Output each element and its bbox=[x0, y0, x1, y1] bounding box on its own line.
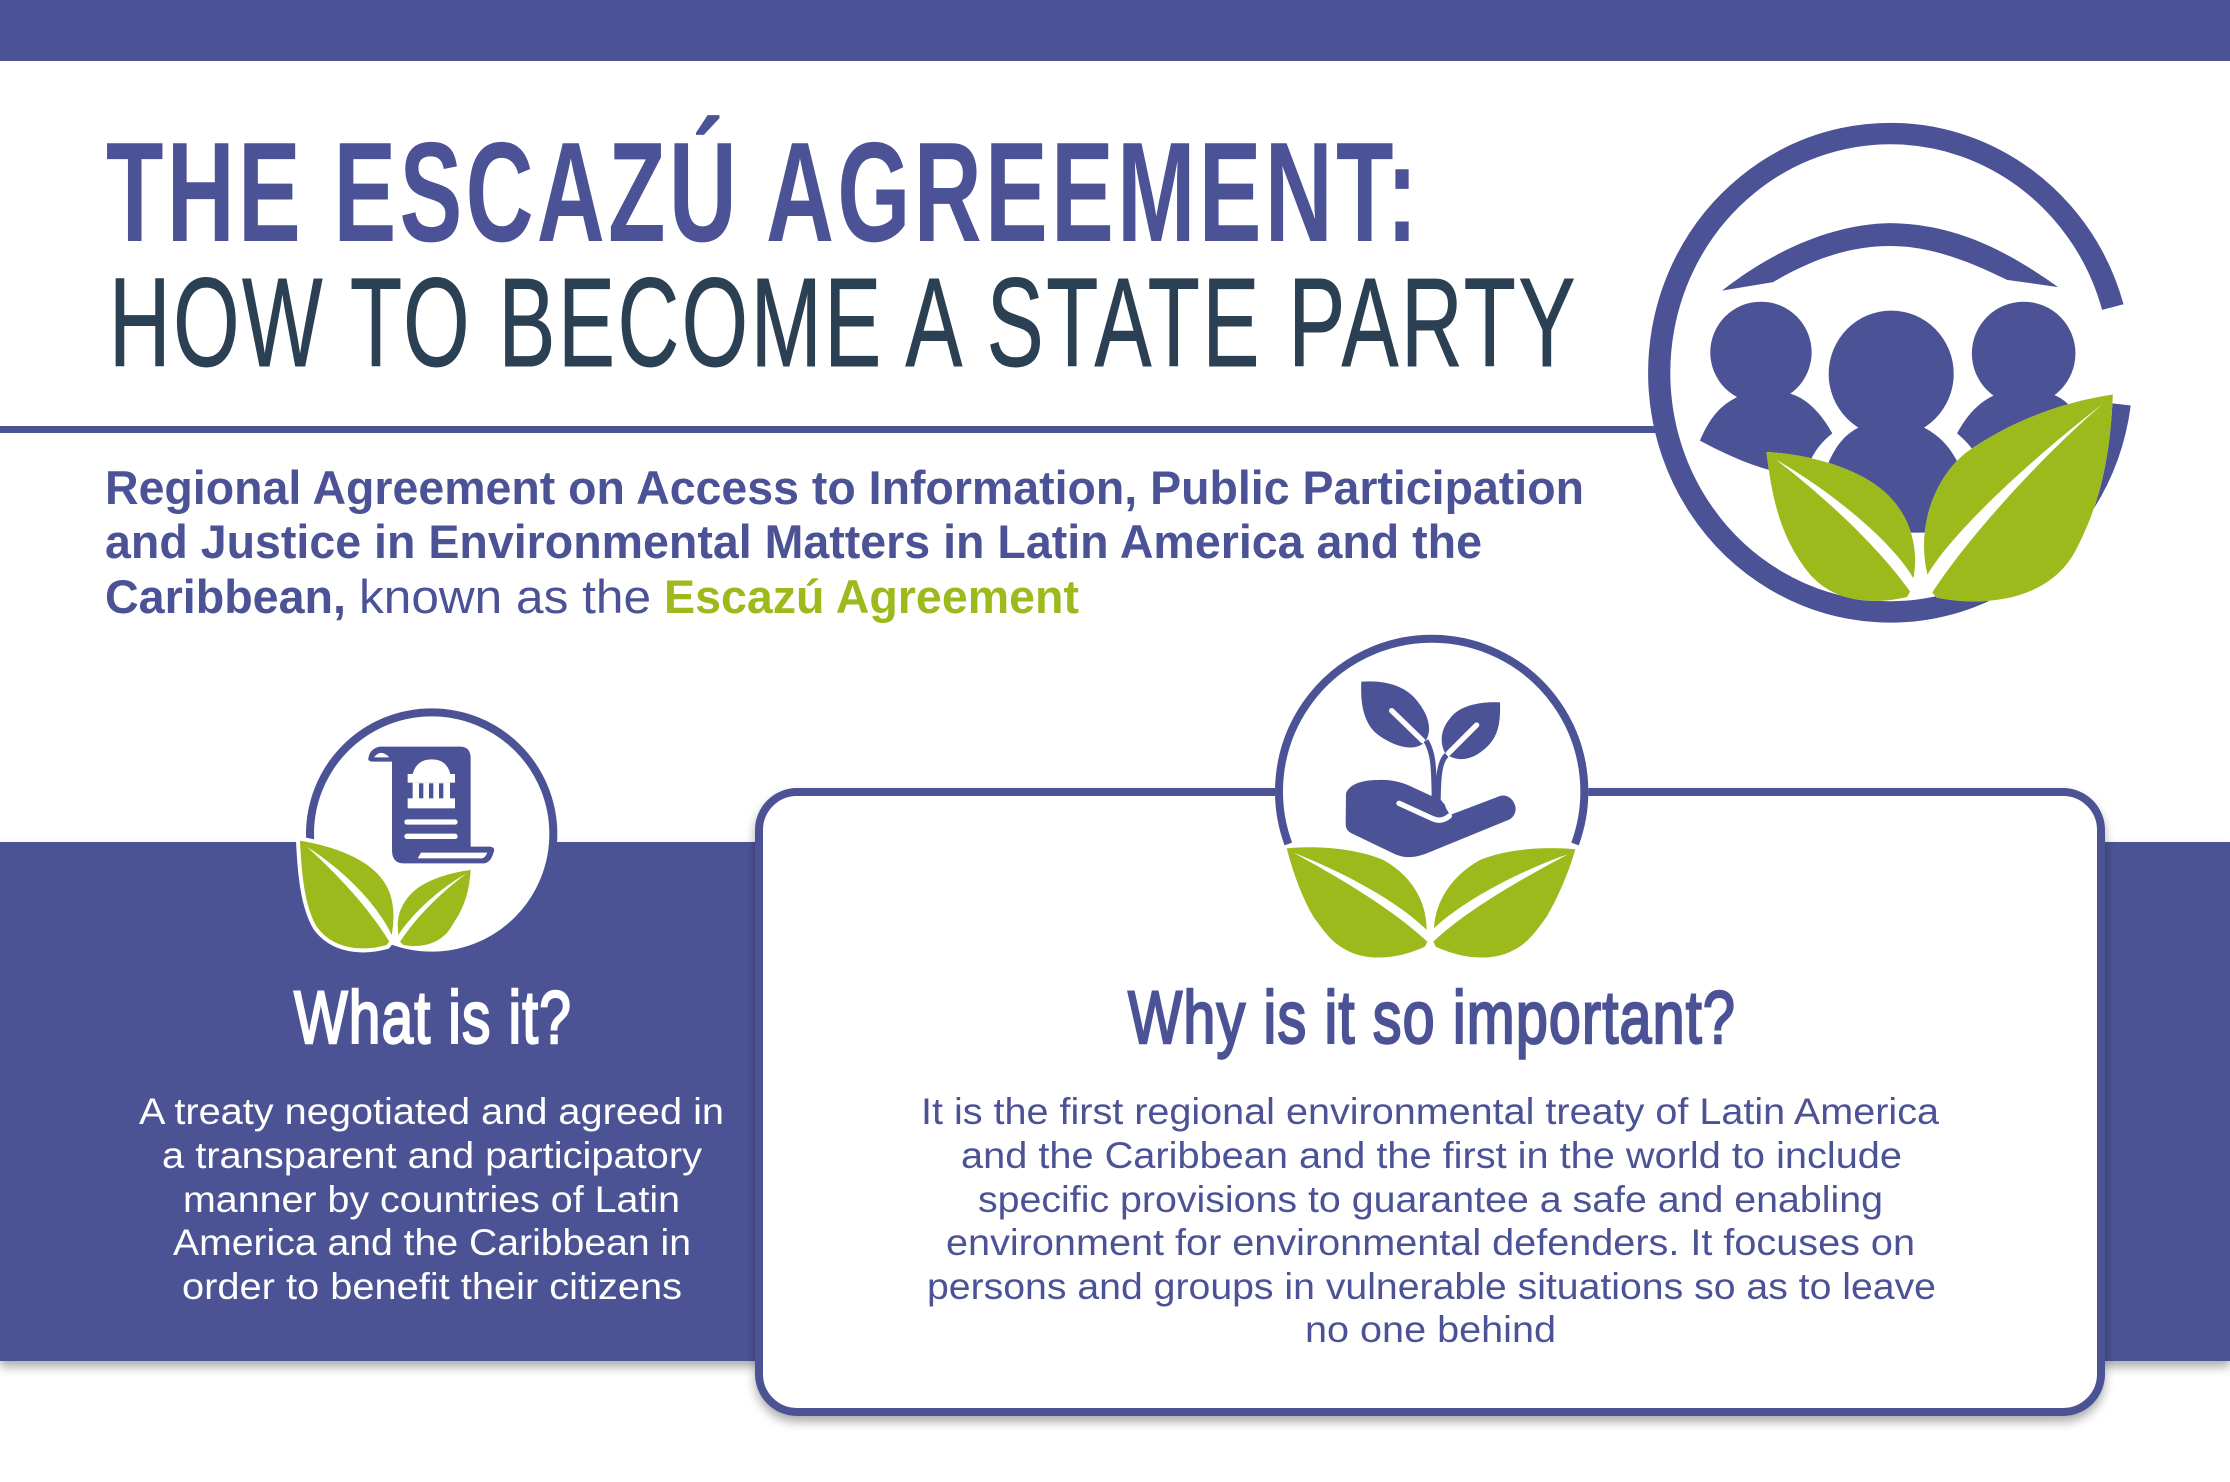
title: THE ESCAZÚ AGREEMENT: bbox=[106, 113, 1421, 272]
purple band left bbox=[0, 842, 760, 1361]
title: HOW TO BECOME A STATE PARTY bbox=[109, 252, 1578, 393]
subtitle text: Escazú Agreement bbox=[664, 570, 1079, 623]
text block: why is it so important: It is the first regional environmental treaty of Latin America bbox=[921, 1091, 1939, 1132]
icon green leaves bbox=[1766, 395, 2113, 601]
title bbox=[106, 113, 1578, 393]
icon ring bbox=[1659, 134, 2120, 612]
text block: why is it so important: environment for environmental defenders. It focuses on bbox=[946, 1222, 1915, 1263]
icon people bbox=[1700, 302, 2075, 533]
text block: what is it: a transparent and participatory bbox=[162, 1135, 703, 1176]
plant icon ring bbox=[1279, 639, 1584, 844]
text block: what is it: manner by countries of Latin bbox=[183, 1179, 680, 1220]
purple band right bbox=[2100, 842, 2230, 1361]
subtitle text: and Justice in Environmental Matters in Latin America and the bbox=[105, 515, 1482, 568]
heading: what is it: What is it? bbox=[294, 976, 572, 1059]
text block: why is it so important: specific provisions to guarantee a safe and enabling bbox=[978, 1179, 1883, 1220]
title underline bbox=[0, 426, 1660, 433]
text block: why is it so important bbox=[921, 1091, 1939, 1350]
icon: people and leaves bbox=[1659, 134, 2120, 612]
text block: why is it so important: and the Caribbean and the first in the world to include bbox=[961, 1135, 1902, 1176]
scroll icon leaves bbox=[300, 841, 471, 948]
plant icon circle bbox=[1275, 635, 1588, 948]
heading: why is it so important: Why is it so important? bbox=[1128, 976, 1736, 1059]
icon: scroll and leaves bbox=[300, 712, 553, 956]
plant icon leaves bbox=[1287, 847, 1575, 958]
subtitle text: known as the bbox=[359, 570, 651, 623]
scroll document bbox=[368, 747, 494, 863]
icon: plant in hand and leaves bbox=[1275, 635, 1588, 962]
text block: what is it: order to benefit their citizens bbox=[182, 1266, 682, 1307]
subtitle text: Regional Agreement on Access to Information, Public Participation bbox=[105, 461, 1584, 514]
panel: why is it so important bbox=[759, 792, 2101, 1412]
text block: why is it so important: no one behind bbox=[1305, 1309, 1556, 1350]
icon roof arc bbox=[1722, 223, 2058, 291]
text block: what is it: A treaty negotiated and agreed in bbox=[139, 1091, 724, 1132]
cover below ring bbox=[1283, 845, 1580, 962]
text block: what is it bbox=[139, 1091, 724, 1307]
seedling bbox=[1361, 681, 1500, 802]
subtitle text bbox=[105, 461, 1584, 623]
hand bbox=[1346, 780, 1516, 857]
top bar bbox=[0, 0, 2230, 61]
text block: why is it so important: persons and groups in vulnerable situations so as to leave bbox=[927, 1266, 1936, 1307]
subtitle text: Caribbean, bbox=[105, 570, 346, 623]
text block: what is it: America and the Caribbean in bbox=[173, 1222, 691, 1263]
scroll icon circle bbox=[310, 712, 553, 956]
